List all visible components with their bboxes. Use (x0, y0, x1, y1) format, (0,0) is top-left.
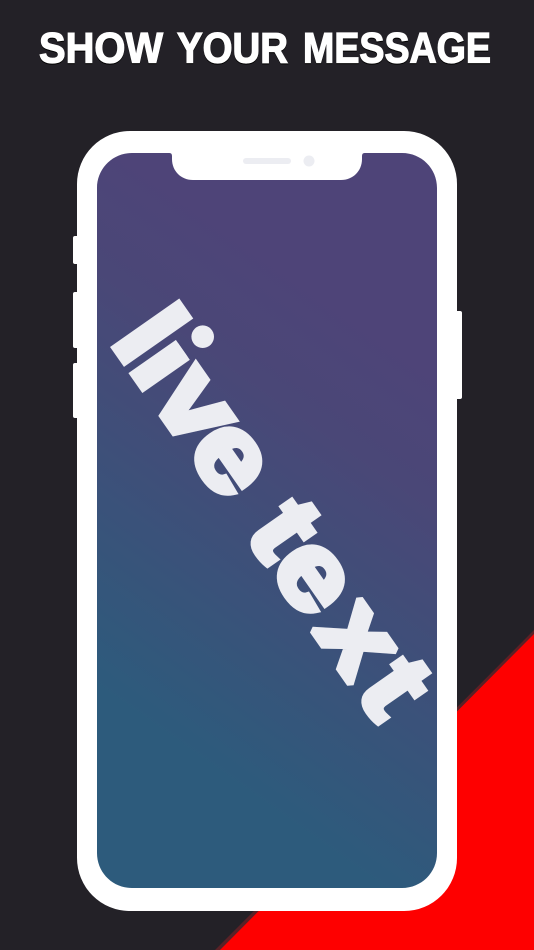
phone screen (97, 153, 437, 888)
title: SHOW (39, 26, 164, 73)
title: YOUR (177, 26, 288, 73)
speaker (243, 158, 291, 164)
phone (73, 131, 462, 911)
side buttons (73, 236, 462, 418)
camera (304, 156, 314, 166)
rotated live text: live text (91, 286, 457, 737)
red corner triangle (215, 630, 534, 950)
title (39, 26, 491, 73)
phone body (77, 131, 457, 911)
title: MESSAGE (303, 26, 491, 73)
